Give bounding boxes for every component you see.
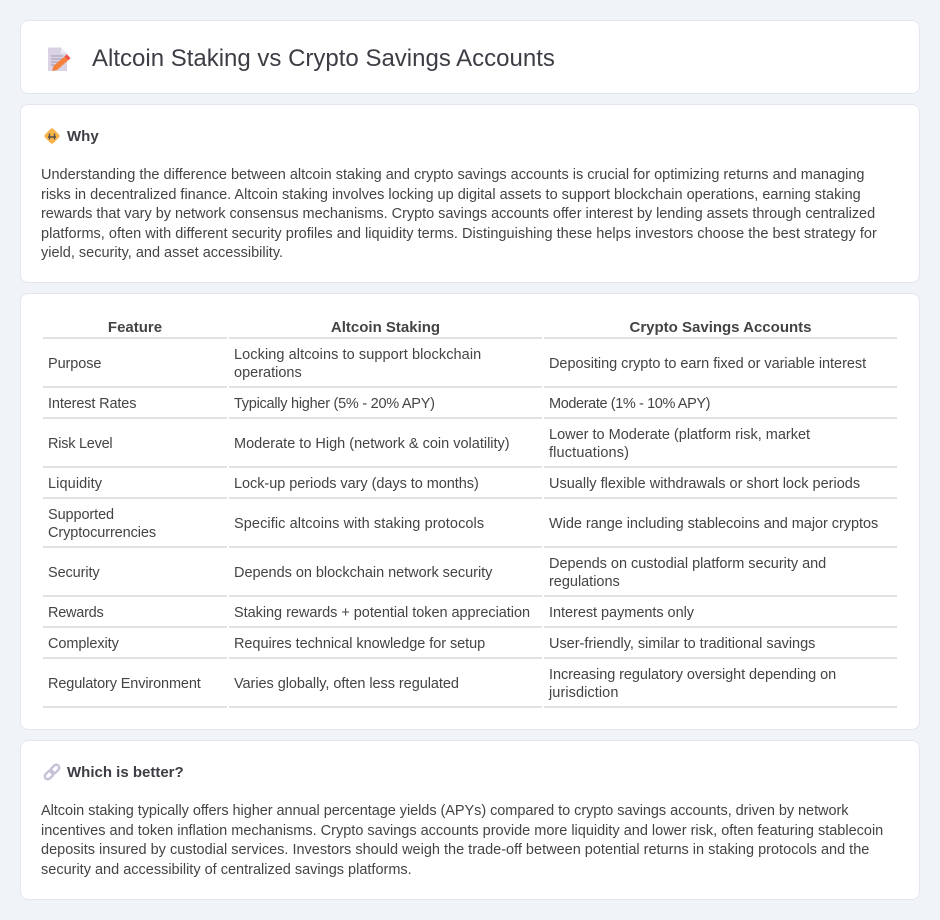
row: security: Depends on blockchain network security xyxy=(234,565,492,581)
row: interest rates: Interest Rates xyxy=(48,396,136,412)
row: liquidity xyxy=(48,476,860,492)
row: liquidity: Lock-up periods vary (days to months) xyxy=(234,476,479,492)
table header: Feature xyxy=(108,319,162,336)
row: complexity: Complexity xyxy=(48,636,119,652)
heading: why: Why xyxy=(67,128,99,145)
table header: Crypto Savings Accounts xyxy=(630,319,811,336)
row: security xyxy=(48,556,826,590)
which is better paragraph: Altcoin staking typically offers higher annual percentage yields (APYs) compared to crypto savings accounts, driven by network xyxy=(41,803,848,819)
why paragraph xyxy=(41,167,877,261)
row: complexity: Requires technical knowledge for setup xyxy=(234,636,485,652)
panel: comparison table xyxy=(20,293,920,730)
row: risk level: Risk Level xyxy=(48,436,112,452)
which is better paragraph: incentives and token inflation mechanisms. Crypto savings accounts provide more liquidity and lower risk, often featuring stablecoin xyxy=(41,822,883,838)
panel: title xyxy=(20,20,920,94)
row: regulatory environment: Increasing regulatory oversight depending on xyxy=(549,667,836,683)
row: security: regulations xyxy=(549,574,620,590)
which is better paragraph: deposits insured by custodial services. Investors should weigh the trade-off between potential returns in staking protocols and the xyxy=(41,842,869,858)
row: purpose: Purpose xyxy=(48,356,101,372)
why paragraph: platforms, often with different security profiles and liquidity terms. Distinguishing these helps investors choose the best strategy for xyxy=(41,226,877,242)
panel: why xyxy=(20,104,920,283)
row: rewards: Rewards xyxy=(48,605,103,621)
icon: chain link xyxy=(44,764,60,780)
icon: memo with pencil xyxy=(48,48,70,71)
row: supported cryptocurrencies: Cryptocurrencies xyxy=(48,525,156,541)
row: purpose: Depositing crypto to earn fixed or variable interest xyxy=(549,356,866,372)
row: liquidity: Usually flexible withdrawals or short lock periods xyxy=(549,476,860,492)
row: purpose: operations xyxy=(234,365,302,381)
heading: which is better: Which is better? xyxy=(67,764,184,781)
row: purpose: Locking altcoins to support blockchain xyxy=(234,347,481,363)
row: risk level: Moderate to High (network & coin volatility) xyxy=(234,436,510,452)
row: rewards xyxy=(48,605,694,621)
why paragraph: Understanding the difference between altcoin staking and crypto savings accounts is crucial for optimizing returns and managing xyxy=(41,167,864,183)
why paragraph: risks in decentralized finance. Altcoin staking involves locking up digital assets to support blockchain operations, earning staking xyxy=(41,186,861,202)
row: regulatory environment: Regulatory Environment xyxy=(48,676,201,692)
row: complexity xyxy=(48,636,815,652)
row: supported cryptocurrencies: Supported xyxy=(48,507,114,523)
row: purpose xyxy=(48,347,866,381)
which is better paragraph xyxy=(41,803,883,878)
icon: warning diamond xyxy=(44,128,60,144)
why paragraph: yield, security, and asset accessibility. xyxy=(41,245,283,261)
panel: which is better xyxy=(20,740,920,900)
row: supported cryptocurrencies: Wide range including stablecoins and major cryptos xyxy=(549,516,878,532)
table header xyxy=(108,319,811,336)
row: security: Security xyxy=(48,565,100,581)
row: supported cryptocurrencies xyxy=(48,507,878,541)
row: interest rates: Moderate (1% - 10% APY) xyxy=(549,396,710,412)
row: regulatory environment: Varies globally, often less regulated xyxy=(234,676,459,692)
title text: Altcoin Staking vs Crypto Savings Accounts xyxy=(92,45,555,72)
row: rewards: Interest payments only xyxy=(549,605,694,621)
row: risk level: Lower to Moderate (platform risk, market xyxy=(549,427,810,443)
table header: Altcoin Staking xyxy=(331,319,440,336)
row: interest rates: Typically higher (5% - 20% APY) xyxy=(234,396,435,412)
row: rewards: Staking rewards + potential token appreciation xyxy=(234,605,530,621)
row: regulatory environment: jurisdiction xyxy=(549,685,618,701)
row: risk level: fluctuations) xyxy=(549,445,629,461)
row: risk level xyxy=(48,427,810,461)
row: liquidity: Liquidity xyxy=(48,476,102,492)
why paragraph: rewards that vary by network consensus mechanisms. Crypto savings accounts offer interest by lending assets through centralized xyxy=(41,206,875,222)
row: security: Depends on custodial platform security and xyxy=(549,556,826,572)
row: regulatory environment xyxy=(48,667,836,701)
row: supported cryptocurrencies: Specific altcoins with staking protocols xyxy=(234,516,484,532)
which is better paragraph: security and accessibility of centralized savings platforms. xyxy=(41,862,412,878)
row: interest rates xyxy=(48,396,710,412)
row: complexity: User-friendly, similar to traditional savings xyxy=(549,636,815,652)
